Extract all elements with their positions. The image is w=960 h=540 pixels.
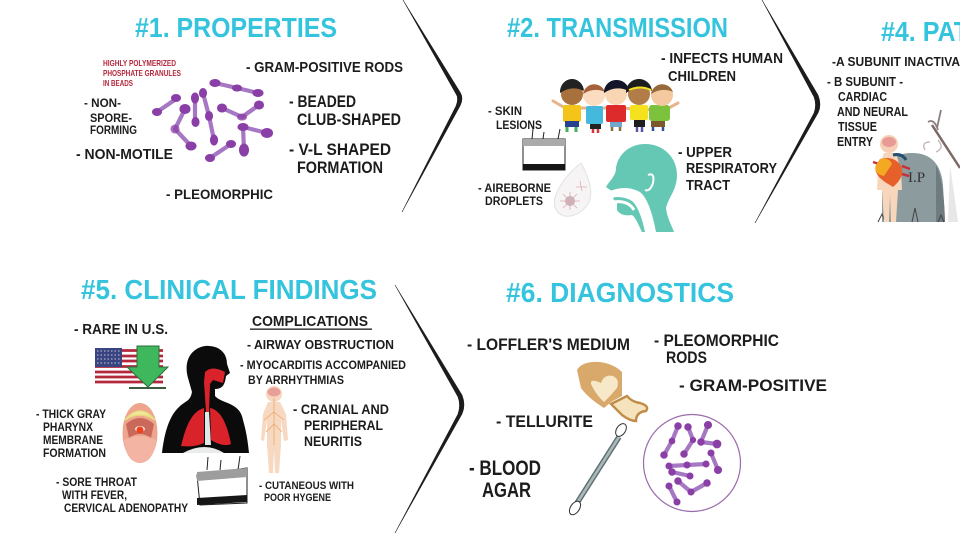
text: beaded club-shaped: - BEADED [289,93,356,111]
arrow: chevron 3 [395,285,464,533]
heading: transmission: #2. TRANSMISSION [507,12,728,43]
text: blood agar: AGAR [482,479,531,502]
icon: skin block [523,129,565,170]
text: airborne droplets: - AIREBORNE [478,181,551,195]
text: v-l shaped formation: FORMATION [297,159,383,177]
text: phosphate granules note [103,58,181,88]
text: neuritis: NEURITIS [304,433,362,449]
text: blood agar: - BLOOD [469,457,541,480]
text: non-spore-forming [84,96,137,137]
text: myocarditis [240,358,406,387]
illustration: forceps and skeleton [924,110,960,222]
panel: transmission [478,12,783,232]
text: beaded club-shaped [289,93,401,129]
text: b subunit: CARDIAC [838,89,887,104]
text: thick gray membrane: MEMBRANE [43,433,103,447]
text: thick gray membrane [36,407,106,460]
text: upper respiratory tract [678,144,777,194]
icon: tombstone: I.P [908,170,925,186]
text: myocarditis: BY ARRHYTHMIAS [248,373,344,387]
illustration: beaded rods [152,80,272,162]
text: b subunit: AND NEURAL [837,104,908,119]
icon: body with heart [873,135,910,222]
panel: pathogenesis [827,16,960,222]
text: b subunit [827,74,908,149]
text: skin lesions: - SKIN [488,104,522,118]
text: sore throat: WITH FEVER, [62,488,127,502]
text: cutaneous [259,480,354,504]
text: sore throat: CERVICAL ADENOPATHY [64,501,188,515]
text: infects human children: CHILDREN [668,68,736,85]
text: complications heading: COMPLICATIONS [252,313,368,330]
text: beaded club-shaped: CLUB-SHAPED [297,111,401,129]
text: v-l shaped formation [289,141,391,177]
icon: skin block lower [197,456,247,505]
text: pleomorphic rods: - PLEOMORPHIC [654,332,779,350]
text: upper respiratory tract: RESPIRATORY [686,160,777,177]
icon: tombstone [878,153,945,222]
text: tellurite: - TELLURITE [496,413,593,431]
text: cutaneous: POOR HYGENE [264,492,331,504]
text: pleomorphic: - PLEOMORPHIC [166,186,273,202]
icon: black torso with respiratory tract [162,346,249,453]
text: b subunit: ENTRY [837,134,873,149]
text: non-spore-forming: FORMING [90,123,137,137]
icon: teal head profile [606,144,677,232]
text: thick gray membrane: - THICK GRAY [36,407,106,421]
text: rare in u.s.: - RARE IN U.S. [74,321,168,338]
panel: diagnostics [467,277,827,517]
text: gram-positive rods: - GRAM-POSITIVE RODS [246,59,403,76]
text: cutaneous: - CUTANEOUS WITH [259,480,354,492]
text: skin lesions: LESIONS [496,118,542,132]
arrow: chevron 2 [755,0,820,223]
icon: bacteria in circle [644,414,740,512]
text: phosphate granules note: IN BEADS [103,78,133,88]
panel: properties [76,12,403,202]
text: non-spore-forming: - NON- [84,96,121,110]
text: neuritis: PERIPHERAL [304,417,383,433]
text: neuritis: - CRANIAL AND [293,401,389,417]
text: blood agar [469,457,541,502]
text: pleomorphic rods [654,332,779,367]
text: sore throat [56,475,188,515]
icon: cotton swab [567,422,629,517]
text: airway obstruction: - AIRWAY OBSTRUCTION [247,337,394,352]
text: airborne droplets: DROPLETS [485,194,543,208]
panel: clinical findings [36,274,406,515]
text: pleomorphic rods: RODS [666,349,707,367]
text: phosphate granules note: PHOSPHATE GRANULES [103,68,181,78]
text: b subunit: TISSUE [838,119,877,134]
heading: properties: #1. PROPERTIES [135,12,337,43]
text: upper respiratory tract: - UPPER [678,144,732,161]
text: phosphate granules note: HIGHLY POLYMERIZED [103,58,176,68]
text: b subunit: - B SUBUNIT - [827,74,903,89]
heading: clinical findings: #5. CLINICAL FINDINGS [81,274,377,305]
text: skin lesions [488,104,542,132]
text: loffler's medium: - LOFFLER'S MEDIUM [467,336,630,354]
text: non-spore-forming: SPORE- [90,111,132,125]
icon: us flag with down arrow [95,346,168,389]
text: v-l shaped formation: - V-L SHAPED [289,141,391,159]
text: non-motile: - NON-MOTILE [76,146,173,163]
text: thick gray membrane: PHARYNX [43,420,93,434]
icon: bread loaf [577,362,647,421]
text: myocarditis: - MYOCARDITIS ACCOMPANIED [240,358,406,372]
heading: diagnostics: #6. DIAGNOSTICS [506,277,734,308]
icon: open mouth [122,403,158,463]
text: thick gray membrane: FORMATION [43,446,106,460]
text: infects human children [661,50,783,85]
text: neuritis [293,401,389,449]
text: infects human children: - INFECTS HUMAN [661,50,783,67]
arrow: chevron 1 [402,0,462,212]
icon: nervous system body [261,386,288,473]
text: upper respiratory tract: TRACT [686,177,730,194]
text: airborne droplets [478,181,551,208]
illustration: five children [553,79,678,133]
text: sore throat: - SORE THROAT [56,475,138,489]
text: gram-positive: - GRAM-POSITIVE [679,377,827,395]
icon: droplet with bacteria [554,163,591,216]
